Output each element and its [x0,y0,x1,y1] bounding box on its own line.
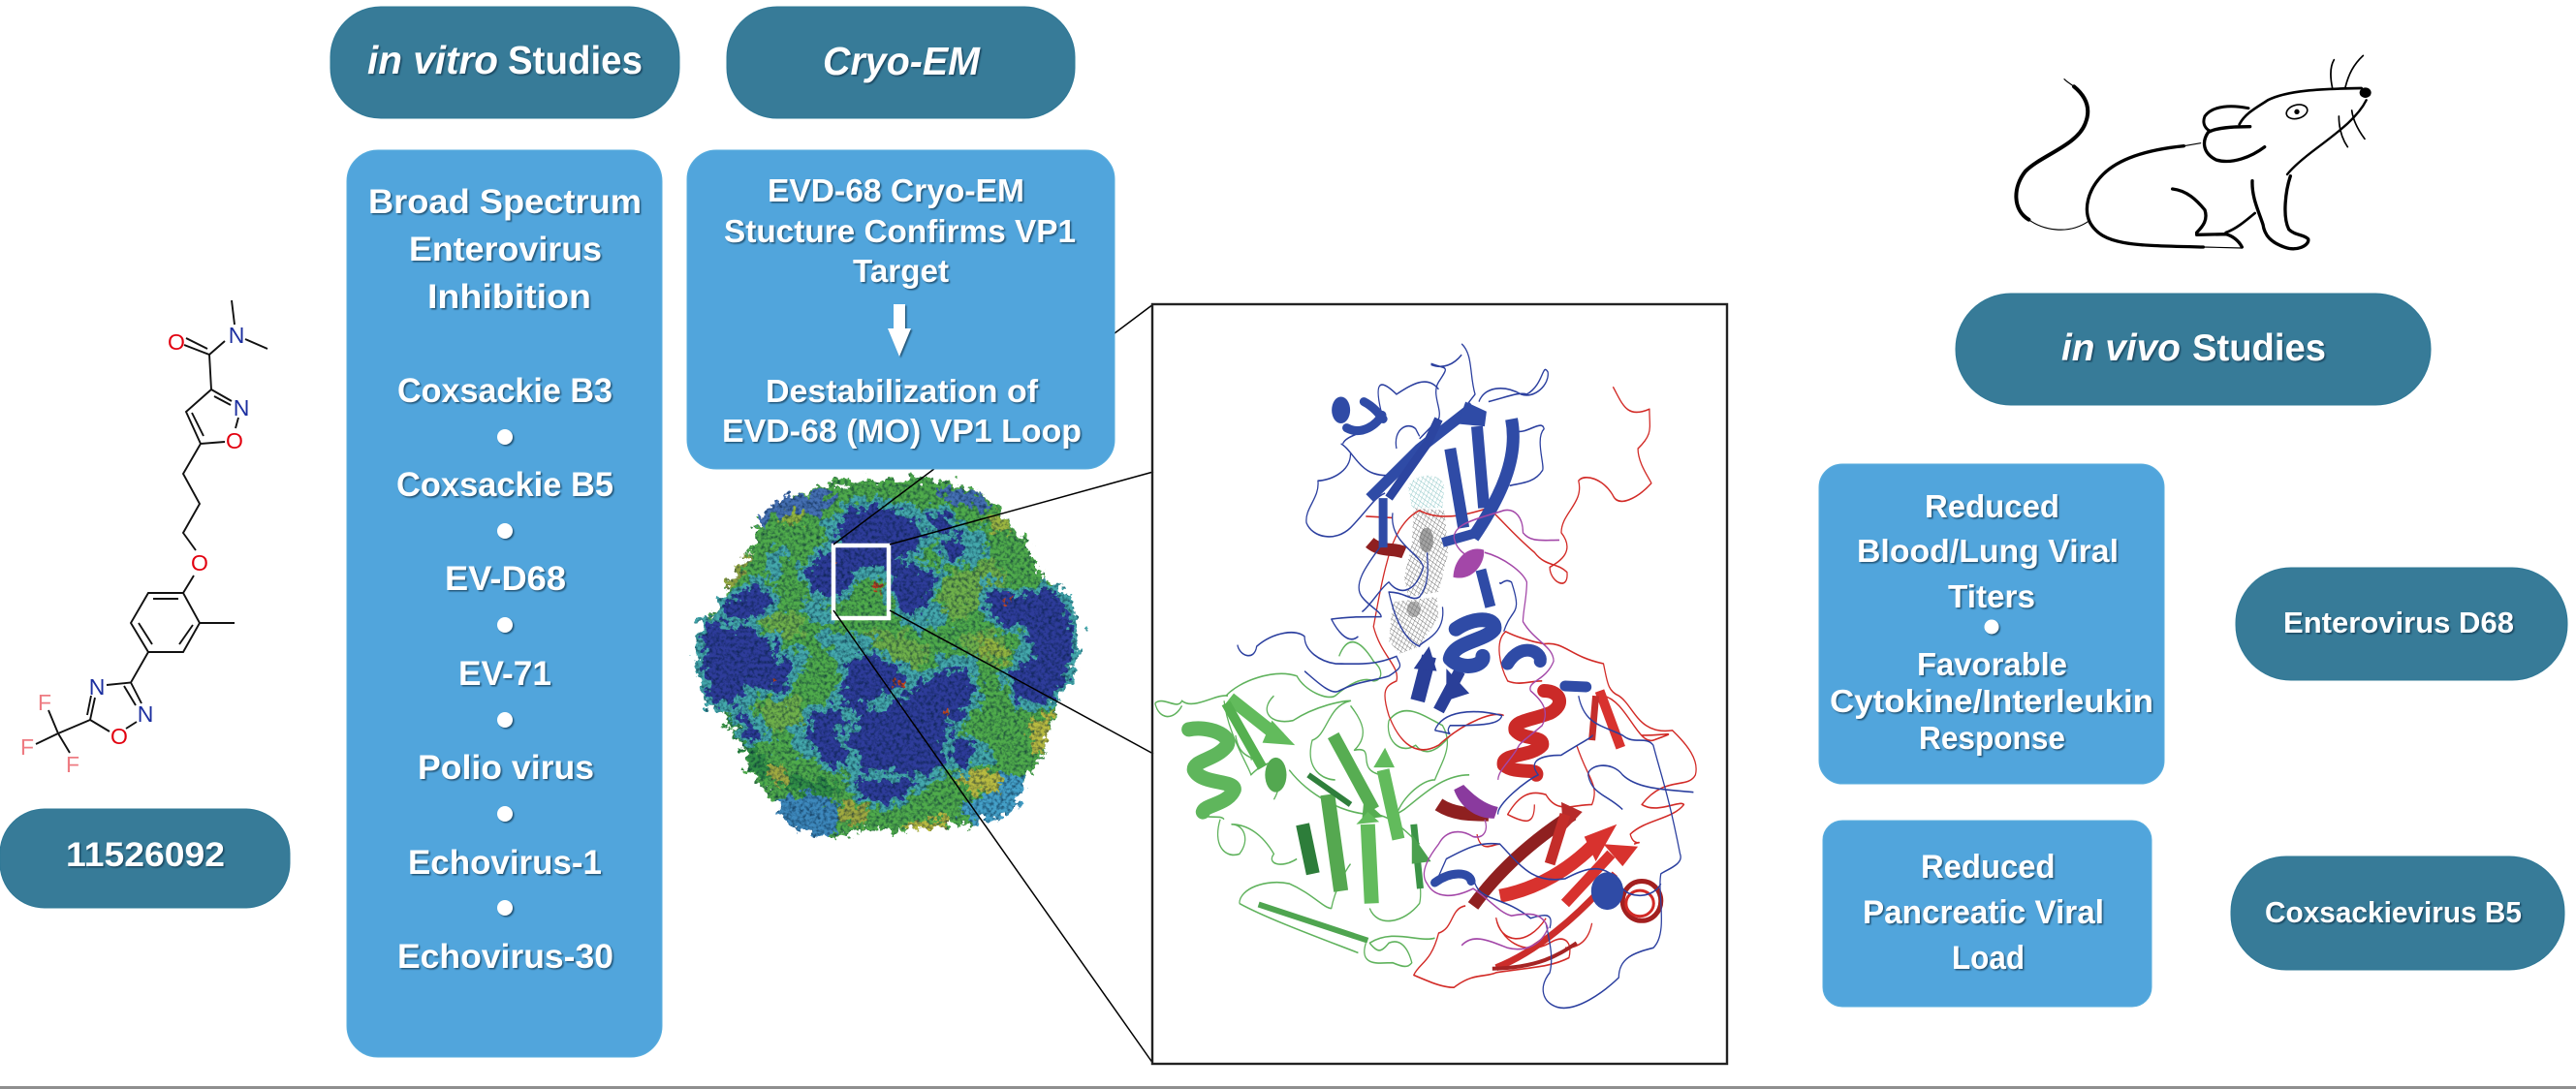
panel text: Coxsackie B3 [397,372,613,410]
red subunit VP2 [1366,387,1696,987]
atom labels: O [226,428,243,453]
panel text [368,183,642,976]
pill: Coxsackievirus B5 [2231,856,2564,970]
atom labels: F [38,690,51,715]
label: Enterovirus D68: Enterovirus D68 [2283,606,2514,639]
panel: cryo-EM findings [687,150,1115,469]
panel: enterovirus D68 in vivo results [1819,464,2164,784]
heading: Cryo-EM: Cryo-EM [823,39,981,83]
pill: in vivo Studies [1956,294,2431,405]
heading: in vitro Studies: Studies [508,38,643,82]
purple VP1 loop [1424,510,1559,949]
panel: coxsackievirus B5 in vivo results [1823,821,2152,1007]
panel text: Reduced [1921,849,2055,886]
panel text: Broad Spectrum [368,183,642,221]
atom labels: F [20,734,34,760]
atom labels: O [191,550,208,576]
pill: compound id [0,809,290,908]
pill: Enterovirus D68 [2236,568,2567,680]
panel text: Inhibition [427,278,591,316]
pill: Cryo-EM [727,7,1075,118]
label: Coxsackievirus B5: Coxsackievirus B5 [2265,895,2522,929]
panel text: Destabilization of [766,373,1039,409]
panel: broad spectrum in vitro [347,150,662,1057]
protein ribbon structure [1155,344,1696,1008]
panel text: Load [1952,940,2025,977]
heading: in vitro Studies: in vitro [367,38,498,82]
panel text: EV-D68 [445,560,566,598]
panel text: Pancreatic Viral [1863,894,2104,931]
white selection box on virus [833,545,889,618]
panel text: Stucture Confirms VP1 [724,213,1076,249]
atom labels: N [234,395,249,420]
chemical structure of 11526092 [20,300,267,777]
atom labels: N [229,323,244,348]
ligand mesh density [1389,476,1448,654]
atom labels: N [138,701,153,727]
panel text: Reduced [1925,488,2059,524]
green subunit VP3 [1155,642,1469,966]
panel text: Echovirus-1 [408,844,602,882]
atom labels: O [168,329,185,355]
panel text: EVD-68 (MO) VP1 Loop [722,413,1082,449]
atom labels: N [89,674,105,700]
blue subunit VP1 [1238,344,1693,1008]
heading: in vitro Studies [367,38,643,82]
panel text: Echovirus-30 [397,938,613,976]
panel text: EVD-68 Cryo-EM [768,172,1024,208]
panel text: Cytokine/Interleukin [1830,683,2153,719]
teal capsid bands [720,501,1066,778]
panel text [1830,488,2153,756]
atom labels: F [66,752,79,777]
panel text: Enterovirus [409,231,602,268]
connector lines from virus box to protein frame [833,304,1153,1064]
heading: in vivo Studies: in vivo [2061,327,2181,369]
atom labels: O [110,724,128,749]
panel text [1863,849,2104,977]
panel text: Polio virus [418,749,594,787]
pill: in vitro Studies [330,7,679,118]
heading: in vivo Studies [2061,327,2326,369]
panel text: Blood/Lung Viral [1857,533,2119,569]
virus capsid surface [703,478,1073,840]
panel text: Favorable [1917,646,2067,682]
frame: VP1 protein structure [1152,304,1727,1064]
label: 11526092: 11526092 [66,836,225,874]
atom labels [20,323,249,777]
icon: mouse [2016,55,2372,249]
panel text: Coxsackie B5 [396,466,613,504]
panel text: Target [853,253,949,289]
panel text: EV-71 [458,655,551,693]
heading: in vivo Studies: Studies [2192,327,2326,369]
panel text [722,172,1082,449]
panel text: Titers [1948,578,2035,614]
panel text: Response [1919,720,2065,756]
